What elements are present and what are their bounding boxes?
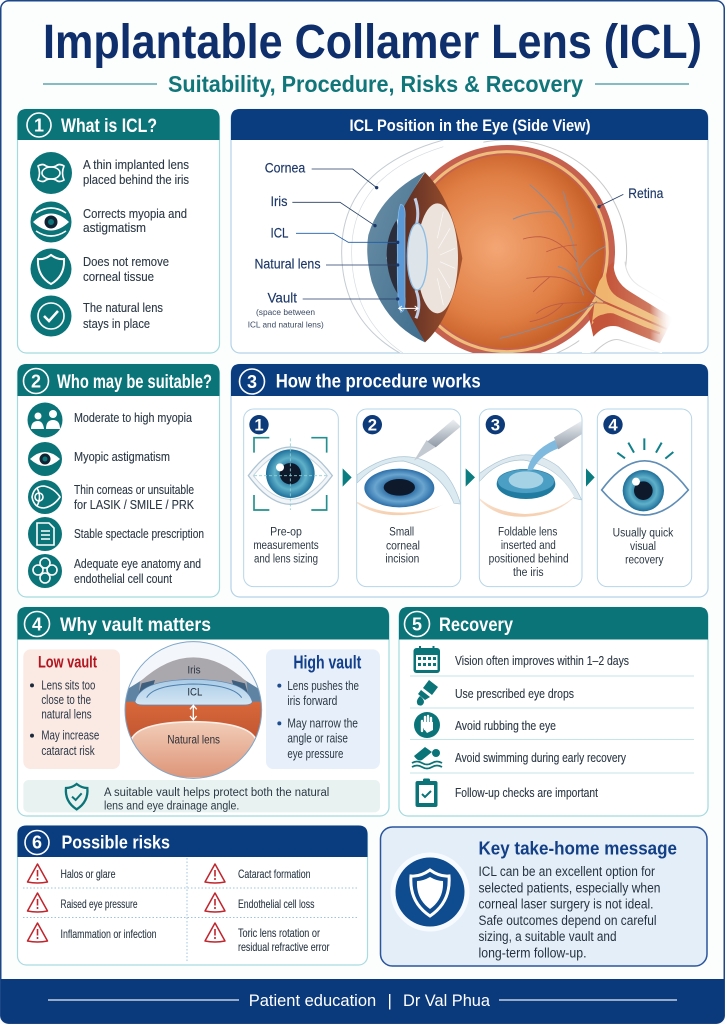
text: key message: ICL can be an excellent option for [478,864,655,879]
callout: high vault: High vault [293,651,361,672]
panel: why vault matters [18,607,389,816]
heading: possible risks: Possible risks [62,832,170,852]
panel: ICL position in the eye [231,109,708,363]
step 4 card: recovery [625,553,663,567]
step 3 card: inserted and [501,538,556,552]
badge: 2 [24,368,48,394]
callout: high vault [266,649,380,769]
badge: 5: 5 [412,614,422,634]
subtitle: Suitability, Procedure, Risks & Recovery [168,71,583,97]
risk: endothelial: Endothelial cell loss [238,897,314,911]
risk: toric: Toric lens rotation or [238,926,320,940]
risk: cataract [205,864,310,883]
text: key message: Safe outcomes depend on careful [478,913,656,928]
step 3 card: 3 [491,416,500,435]
callout: low vault: May increase [41,728,99,743]
icon: eye [30,202,72,242]
badge: 5 [404,612,430,636]
text: thin implanted lens: placed behind the iris [83,172,189,187]
text: thin corneas: Thin corneas or unsuitable [74,482,194,497]
icon: shield [30,248,72,290]
text: stable prescription: Stable spectacle prescription [74,526,204,541]
label: vault: (space between [256,307,315,317]
label: vault: Vault [268,290,297,306]
text: follow-up: Follow-up checks are important [455,785,598,800]
icon: check [30,296,72,336]
badge: 3: 3 [247,372,257,392]
step 4 card: Usually quick [613,526,674,540]
badge: 1 [27,113,51,137]
heading: why vault matters: Why vault matters [60,614,211,636]
step 2 card: incision [385,552,419,566]
callout: high vault: Lens pushes the [287,678,359,693]
step 3 card: the iris [513,565,544,579]
text: corrects myopia: Corrects myopia and [83,206,187,221]
heading: key take-home: Key take-home message [478,838,677,858]
callout: suitable vault: lens and eye drainage angle. [104,798,239,812]
label: iris: Iris [270,193,288,209]
step 2 card: corneal [386,538,420,552]
icon: clipboard [416,778,438,807]
illustration: eye side view [292,140,678,363]
text: natural lens stays: The natural lens [83,300,163,315]
text: vision improves: Vision often improves within 1–2 days [455,653,629,668]
step 1 card: Pre-op [270,525,302,539]
label: vault [248,290,324,330]
step 4 card [597,409,692,587]
callout: high vault: angle or raise [287,731,348,746]
arrow: step 3 to 4 [586,468,595,487]
icon: swimmer [412,747,442,768]
step 4 card: visual [630,539,656,553]
risk: halos [28,864,116,883]
text: corrects myopia: astigmatism [83,220,146,235]
footer: | [388,991,392,1010]
text: thin implanted lens: A thin implanted lens [83,157,189,172]
text: thin implanted lens [83,157,189,187]
text: eye drops: Use prescribed eye drops [455,686,574,701]
step 1 card: and lens sizing [254,551,318,565]
text: key message: selected patients, especially when [478,880,660,896]
risk: toric [205,923,330,954]
step 1 card: measurements [253,538,319,552]
step 2 card [357,409,461,587]
risk: pressure: Raised eye pressure [60,897,138,911]
panel: possible risks [18,826,368,965]
callout: low vault: Low vault [38,653,97,672]
risk: halos: Halos or glare [60,867,116,881]
step 2 card: Small [389,525,414,539]
text: anatomy: endothelial cell count [74,571,172,586]
icon: shield badge [390,852,470,932]
callout: suitable vault: A suitable vault helps protect both the natural [104,785,329,799]
text: myopia: Moderate to high myopia [74,410,193,425]
callout: high vault: May narrow the [287,715,358,730]
badge: 4 [24,612,50,636]
label: vault: ICL and natural lens) [248,320,324,330]
badge: 4: 4 [32,614,42,634]
text: thin corneas: for LASIK / SMILE / PRK [74,497,194,512]
icon: hand [414,712,440,738]
risk: inflammation: Inflammation or infection [60,927,156,941]
callout: low vault [23,649,120,769]
panel: how the procedure works [231,364,708,597]
label: ICL: ICL [270,224,289,240]
callout: low vault: cataract risk [41,743,95,758]
illustration: vault close-up: ICL [187,686,202,698]
text: no swimming: Avoid swimming during early recovery [455,750,626,765]
illustration: vault close-up: Natural lens [167,733,220,746]
text: no corneal removal: corneal tissue [83,269,154,284]
arrow: step 1 to 2 [343,468,352,487]
step 2 card: 2 [368,416,377,435]
icon: eye [28,442,62,476]
footer: Patient education [249,991,376,1010]
panel: key take-home message [380,827,707,966]
heading: What is ICL?: What is ICL? [61,115,157,137]
footer: Dr Val Phua [403,991,491,1010]
step 3 card: positioned behind [489,551,569,565]
risk: toric: residual refractive error [238,940,330,954]
callout: suitable vault [23,780,380,812]
footer [1,979,724,1023]
heading: ICL position: ICL Position in the Eye (Side View) [350,117,590,135]
step 4 card: 4 [608,416,618,435]
text: no corneal removal [83,254,169,284]
text: key message: long-term follow-up. [478,946,586,960]
icon: eye drops [417,680,438,706]
icon: cells [28,554,62,588]
risk: inflammation [28,923,156,942]
heading: recovery: Recovery [439,614,513,636]
text: thin corneas [74,482,194,512]
panel: recovery [399,607,708,816]
text: anatomy: Adequate eye anatomy and [74,556,201,571]
badge: 6 [25,830,49,854]
text: corrects myopia [83,206,187,235]
risk: cataract: Cataract formation [238,867,310,881]
icon: people [28,402,62,438]
risk: endothelial [205,893,314,912]
icon: document [28,517,62,551]
icon: lens [30,152,72,194]
text: astigmatism: Myopic astigmatism [74,449,170,464]
text: natural lens stays [83,300,163,331]
illustration: vault close-up [123,640,263,780]
badge: 6: 6 [32,832,42,852]
label: retina: Retina [628,185,663,201]
callout: low vault: natural lens [41,707,92,722]
icon: calendar [414,646,440,673]
callout: high vault: eye pressure [287,746,343,761]
label: natural lens: Natural lens [254,256,320,272]
text: no rubbing: Avoid rubbing the eye [455,718,556,733]
arrow: step 2 to 3 [466,468,475,487]
heading: who may be suitable: Who may be suitable? [57,371,212,393]
step 1 card: 1 [254,416,264,435]
text: key message [478,864,660,960]
callout: low vault: close to the [41,692,91,707]
callout: high vault: iris forward [287,693,337,708]
text: anatomy [74,556,201,586]
badge: 2: 2 [31,372,41,392]
text: key message: corneal laser surgery is not ideal. [478,896,654,912]
step 3 card [479,409,582,587]
text: natural lens stays: stays in place [83,316,150,331]
step 3 card: Foldable lens [498,525,557,539]
badge: 3 [240,369,264,394]
text: key message: sizing, a suitable vault and [478,929,616,944]
badge: 1: 1 [34,116,44,136]
arrow: vault [399,306,418,311]
heading: how the procedure works: How the procedure works [276,370,481,392]
risk: pressure [28,893,138,912]
label: cornea: Cornea [265,160,305,176]
text: no corneal removal: Does not remove [83,254,169,269]
callout: low vault: Lens sits too [41,677,95,692]
step 1 card [244,409,338,587]
panel: who may be suitable [18,364,220,597]
illustration: vault close-up: Iris [187,665,201,677]
panel: what is ICL [18,109,220,353]
icon: side eye [28,480,62,514]
